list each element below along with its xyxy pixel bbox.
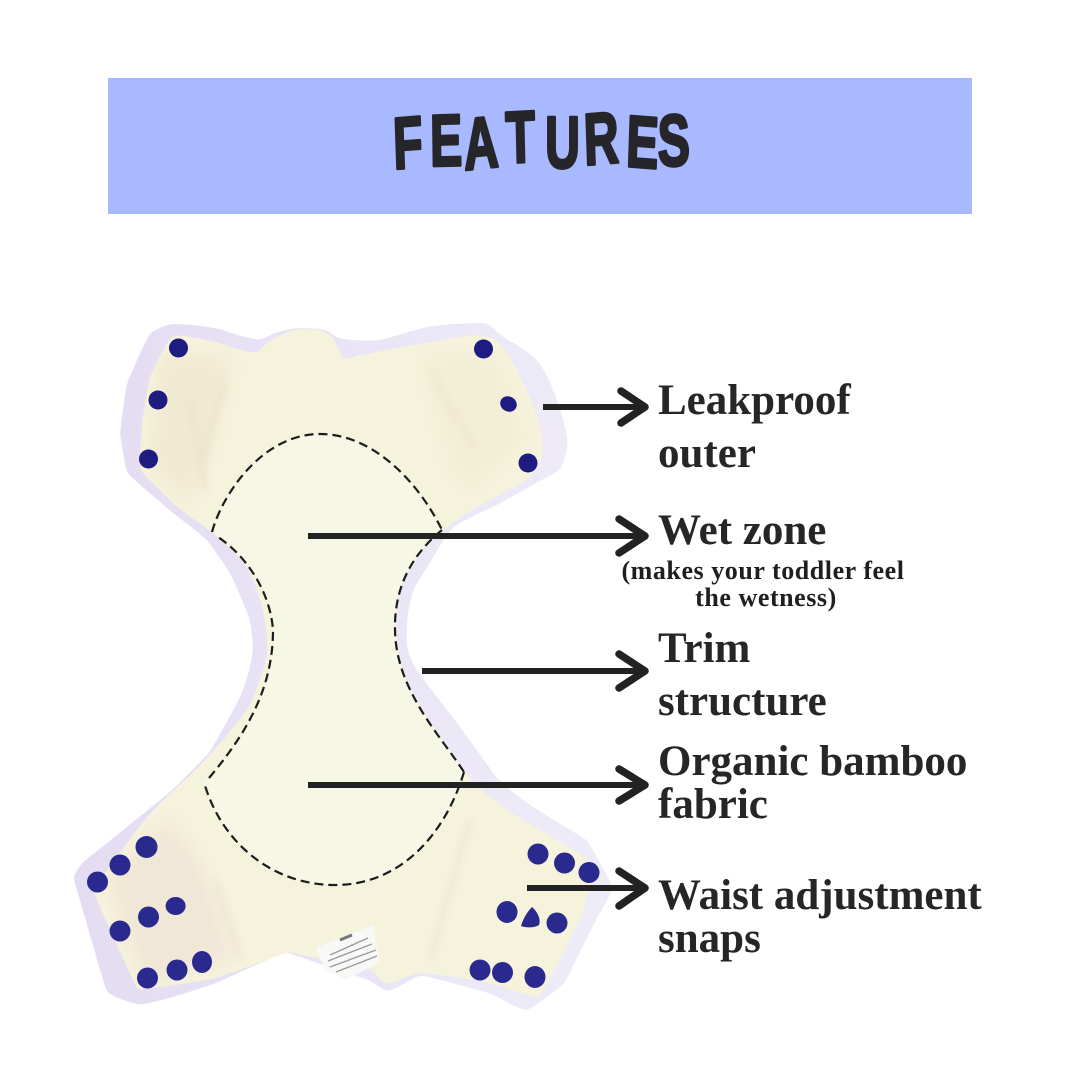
arrow: wet zone xyxy=(308,519,645,553)
label: organic bamboo fabric xyxy=(658,738,967,828)
label: organic bamboo fabric: fabric xyxy=(658,781,768,828)
arrow: leakproof outer xyxy=(543,391,645,423)
diaper fabric xyxy=(93,329,593,998)
label: organic bamboo fabric: Organic bamboo xyxy=(658,738,967,785)
arrow: organic bamboo fabric xyxy=(308,769,645,801)
snaps xyxy=(87,338,600,988)
title: FEATURES xyxy=(392,97,690,186)
diaper illustration xyxy=(73,323,613,1011)
care tag xyxy=(316,925,380,980)
note: wet zone: (makes your toddler feel xyxy=(621,556,905,585)
wet zone dashed outline xyxy=(204,434,464,885)
label: waist adjustment snaps: Waist adjustment xyxy=(658,872,982,919)
label: trim structure xyxy=(658,625,827,725)
label: wet zone: Wet zone xyxy=(658,507,826,554)
diaper trim outline xyxy=(73,323,613,1011)
label: waist adjustment snaps: snaps xyxy=(658,915,761,962)
wet zone pad xyxy=(204,434,464,885)
note: wet zone xyxy=(621,556,905,612)
label: leakproof outer: Leakproof xyxy=(658,377,851,424)
label: trim structure: Trim xyxy=(658,625,750,672)
label: leakproof outer: outer xyxy=(658,430,756,477)
label: leakproof outer xyxy=(658,377,852,477)
title banner xyxy=(108,78,972,214)
arrow: waist adjustment snaps xyxy=(527,871,645,906)
label: waist adjustment snaps xyxy=(658,872,982,962)
arrow: trim structure xyxy=(422,654,645,688)
note: wet zone: the wetness) xyxy=(695,583,837,612)
label: trim structure: structure xyxy=(658,678,827,725)
fabric shading xyxy=(105,350,530,985)
